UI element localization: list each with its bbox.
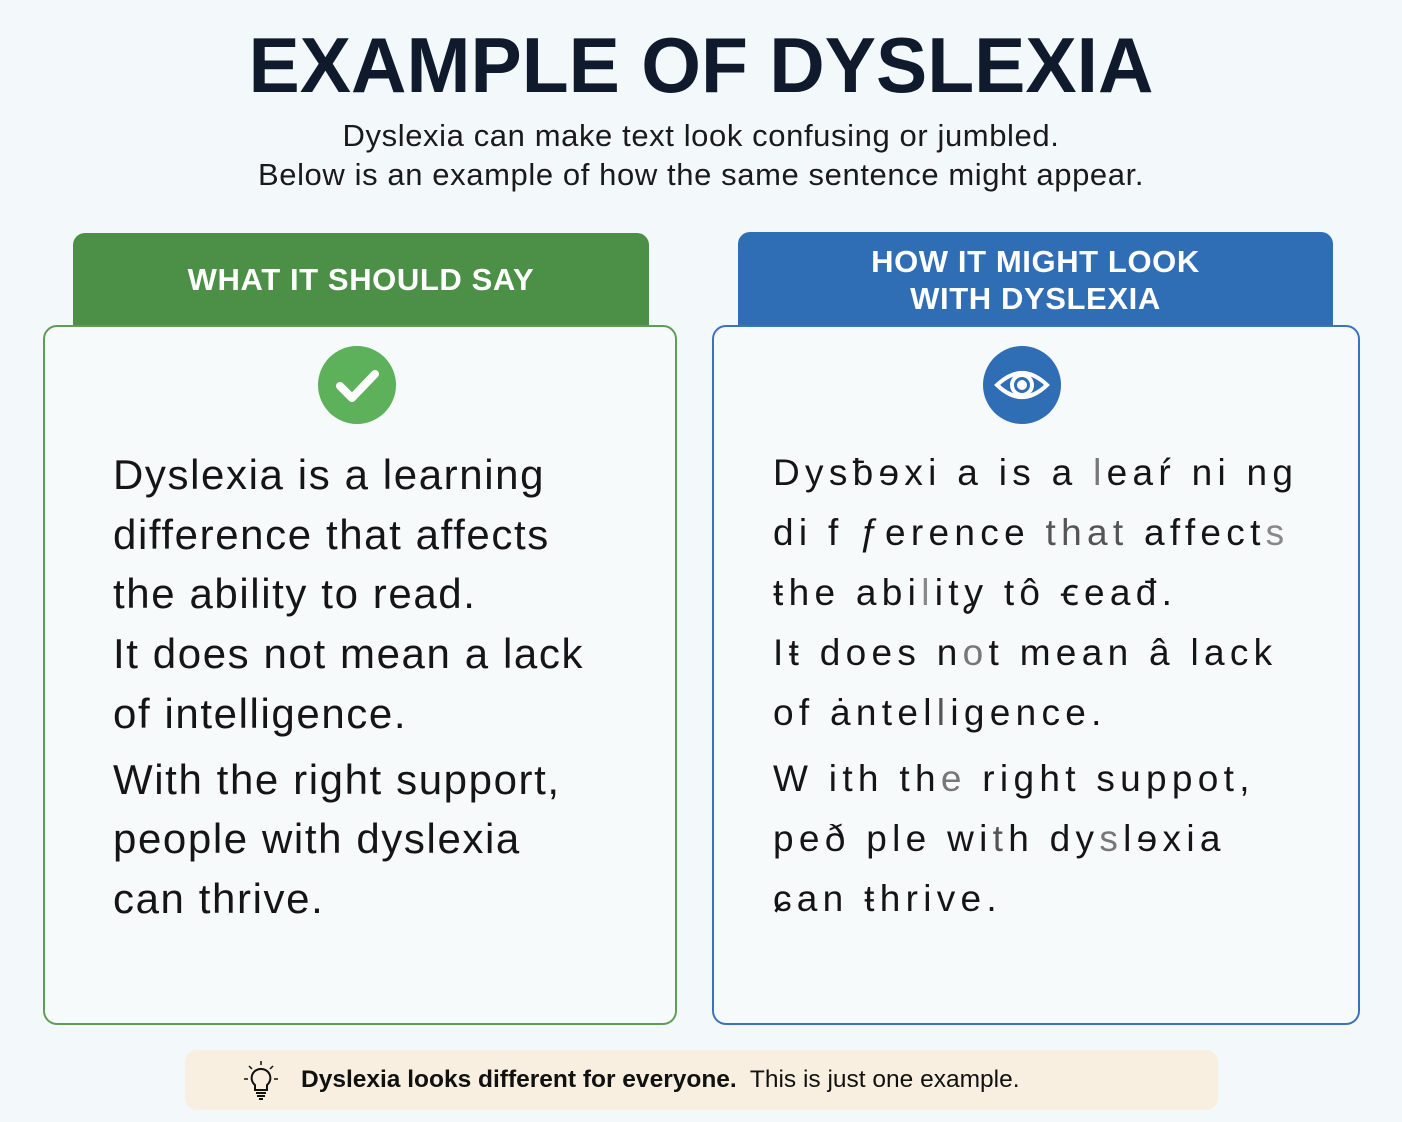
subtitle: Dyslexia can make text look confusing or jumbled. bbox=[343, 118, 1059, 153]
icon: eye bbox=[983, 346, 1061, 424]
jumbled text: ɕan ŧhrive. bbox=[773, 878, 1002, 919]
icon: check bbox=[318, 346, 396, 424]
correct text: difference that affects bbox=[113, 511, 550, 558]
correct text bbox=[113, 451, 584, 922]
correct text: It does not mean a lack bbox=[113, 630, 584, 677]
header tab: blue bbox=[738, 232, 1333, 327]
jumbled text bbox=[773, 452, 1298, 919]
jumbled text: of ȧntelligence. W ith the right suppot, bbox=[773, 692, 1255, 799]
panel body bbox=[712, 325, 1360, 1025]
panel body bbox=[43, 325, 677, 1025]
correct text: people with dyslexia bbox=[113, 815, 521, 862]
callout: footer note bbox=[185, 1050, 1218, 1110]
jumbled text: Dysƀɘxi a is a leaŕ ni ng bbox=[773, 452, 1298, 493]
correct text: the ability to read. bbox=[113, 570, 477, 617]
jumbled text: peð ple with dyslɘxia bbox=[773, 818, 1226, 859]
header tab: green: WHAT IT SHOULD SAY bbox=[188, 262, 534, 297]
panel: what it should say bbox=[43, 233, 677, 1025]
correct text: can thrive. bbox=[113, 875, 324, 922]
subtitle: Below is an example of how the same sentence might appear. bbox=[258, 157, 1144, 192]
correct text: of intelligence. With the right support, bbox=[113, 690, 561, 803]
footer text: Dyslexia looks different for everyone. This is just one example. bbox=[301, 1066, 1020, 1093]
panel: how it might look bbox=[712, 232, 1360, 1025]
header tab: green bbox=[73, 233, 649, 326]
jumbled text: di f ƒerence that affects bbox=[773, 512, 1289, 553]
title: EXAMPLE OF DYSLEXIA bbox=[248, 21, 1153, 109]
jumbled text: Iŧ does not mean â lack bbox=[773, 632, 1277, 673]
correct text: Dyslexia is a learning bbox=[113, 451, 545, 498]
header tab: blue: WITH DYSLEXIA bbox=[910, 280, 1161, 316]
header tab: blue: HOW IT MIGHT LOOK bbox=[871, 244, 1200, 278]
icon: lightbulb bbox=[244, 1061, 278, 1100]
subtitle bbox=[258, 118, 1144, 192]
jumbled text: ŧhe abilitỿ tô ꞓeađ. bbox=[773, 572, 1177, 613]
